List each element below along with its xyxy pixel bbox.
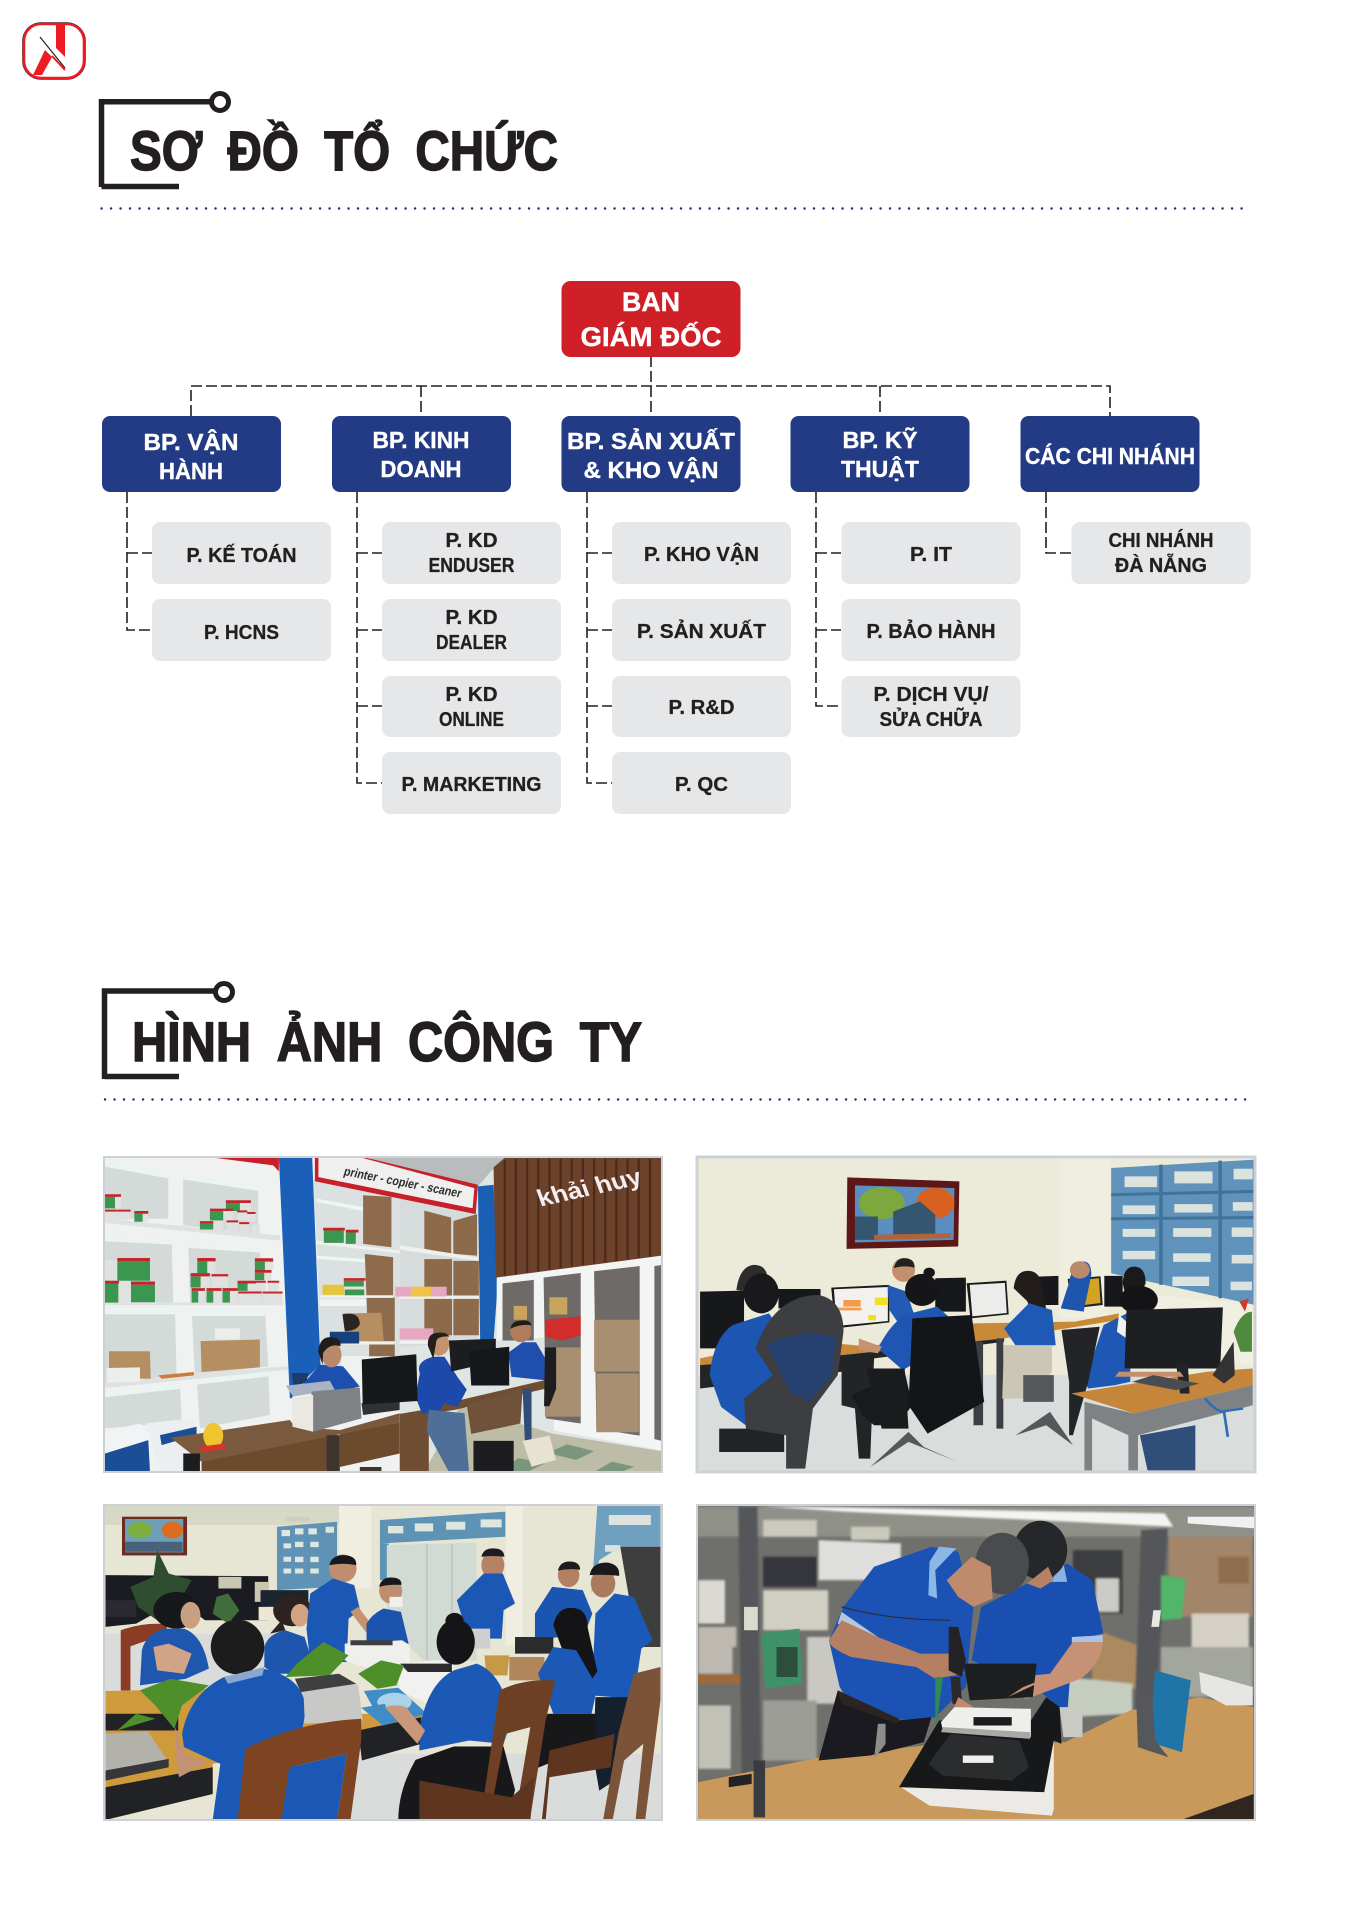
section heading: HÌNH ẢNH CÔNG TY: HÌNH ẢNH CÔNG TY	[132, 1010, 642, 1073]
box: P. KHO VẬN	[612, 522, 791, 584]
box: BP. SẢN XUẤT & KHO VẬN: & KHO VẬN	[584, 456, 718, 483]
box: P. KẾ TOÁN: P. KẾ TOÁN	[186, 544, 296, 567]
box: BAN GIÁM ĐỐC: BAN	[622, 287, 680, 317]
technician right	[972, 1521, 1104, 1714]
scanner and printer	[106, 1674, 427, 1781]
box: P. KD DEALER: DEALER	[436, 631, 507, 654]
section heading: SƠ ĐỒ TỔ CHỨC	[102, 94, 558, 187]
seated staff, foreground	[175, 1608, 597, 1820]
box: P. BẢO HÀNH: P. BẢO HÀNH	[866, 620, 996, 643]
box: P. R&D	[612, 676, 791, 737]
second desk	[400, 1379, 552, 1472]
box: BP. SẢN XUẤT & KHO VẬN: BP. SẢN XUẤT	[567, 426, 736, 454]
photo: office workstations	[697, 1157, 1255, 1472]
wall painting	[847, 1177, 959, 1249]
box: BP. KỸ THUẬT: BP. KỸ	[842, 426, 918, 453]
box: P. KD ONLINE	[382, 676, 561, 737]
computers	[362, 1339, 509, 1404]
box: P. KHO VẬN: P. KHO VẬN	[644, 542, 759, 566]
wooden chairs	[121, 1630, 660, 1820]
box: P. R&D: P. R&D	[668, 696, 734, 719]
floor	[424, 1406, 662, 1472]
box: P. KẾ TOÁN	[152, 522, 331, 584]
staff at desks	[710, 1258, 1158, 1452]
technician left	[819, 1533, 1029, 1761]
box: CHI NHÁNH ĐÀ NẴNG	[1072, 522, 1250, 584]
rack posts	[738, 1507, 1168, 1819]
box: CHI NHÁNH ĐÀ NẴNG: ĐÀ NẴNG	[1115, 554, 1207, 577]
box: P. KD DEALER: P. KD	[446, 606, 498, 629]
box: CÁC CHI NHÁNH: CÁC CHI NHÁNH	[1025, 442, 1195, 469]
box: BP. KỸ THUẬT: THUẬT	[841, 455, 920, 482]
box: P. QC	[612, 752, 791, 814]
box: P. MARKETING	[382, 752, 561, 814]
wood wall with logo	[494, 1157, 662, 1278]
section heading: HÌNH ẢNH CÔNG TY	[104, 984, 642, 1079]
org chart	[102, 281, 1250, 814]
blurred equipment	[729, 1575, 1253, 1817]
box: BP. SẢN XUẤT & KHO VẬN	[562, 416, 740, 492]
blue window	[1111, 1160, 1255, 1305]
workbench	[698, 1697, 1253, 1819]
box: BP. KINH DOANH	[332, 416, 511, 492]
box: BAN GIÁM ĐỐC: GIÁM ĐỐC	[580, 320, 722, 352]
windows	[277, 1505, 660, 1594]
box: P. DỊCH VỤ/ SỬA CHỮA: SỬA CHỮA	[880, 707, 983, 731]
ceiling light	[759, 1506, 1173, 1527]
box: P. HCNS	[152, 599, 331, 661]
box: BAN GIÁM ĐỐC	[562, 281, 740, 357]
box: P. KD DEALER	[382, 599, 561, 661]
photo: team meeting	[104, 1505, 662, 1820]
shelves left part	[105, 1158, 400, 1471]
middle shelves	[400, 1199, 478, 1347]
ceiling	[366, 1157, 507, 1186]
box: P. SẢN XUẤT: P. SẢN XUẤT	[637, 620, 766, 643]
box: P. IT	[842, 522, 1020, 584]
glass cabinet	[497, 1256, 662, 1451]
connectors	[127, 356, 1110, 783]
box: P. DỊCH VỤ/ SỬA CHỮA: P. DỊCH VỤ/	[874, 683, 989, 706]
table and foliage	[106, 1642, 509, 1819]
box: P. BẢO HÀNH	[842, 599, 1020, 661]
printer	[286, 1381, 400, 1432]
desks	[700, 1313, 1119, 1367]
photo: showroom front desk	[104, 1157, 662, 1472]
brand boxes and mascot	[105, 1418, 197, 1471]
toner boxes	[105, 1194, 365, 1303]
office chairs	[744, 1295, 1100, 1469]
box: P. SẢN XUẤT	[612, 599, 791, 661]
box: P. KD ENDUSER	[382, 522, 561, 584]
box: P. QC: P. QC	[675, 773, 728, 796]
box: CHI NHÁNH ĐÀ NẴNG: CHI NHÁNH	[1108, 529, 1214, 552]
box: P. KD ONLINE: ONLINE	[439, 708, 504, 731]
staff member	[292, 1337, 360, 1393]
photo: technicians repairing scanner	[697, 1505, 1255, 1820]
box: BP. VẬN HÀNH: BP. VẬN	[144, 428, 238, 455]
logo	[24, 23, 84, 78]
store sign: printer - copier - scaner	[342, 1165, 464, 1201]
wood wall with logo: khải huy	[533, 1163, 645, 1211]
box: BP. KINH DOANH: DOANH	[380, 456, 462, 482]
printers on table	[345, 1629, 553, 1704]
box: BP. VẬN HÀNH: HÀNH	[159, 457, 223, 484]
box: P. MARKETING: P. MARKETING	[402, 773, 542, 796]
box: P. KD ENDUSER: ENDUSER	[428, 554, 515, 577]
box: BP. VẬN HÀNH	[102, 416, 281, 492]
section heading: SƠ ĐỒ TỔ CHỨC: SƠ ĐỒ TỔ CHỨC	[130, 119, 558, 182]
box: BP. KINH DOANH: BP. KINH	[372, 427, 470, 453]
wall painting	[122, 1517, 187, 1555]
box: P. KD ONLINE: P. KD	[446, 683, 498, 706]
box: BP. KỸ THUẬT	[790, 416, 970, 492]
monitors	[700, 1276, 1123, 1348]
staff	[415, 1320, 556, 1472]
desk foreground	[1071, 1298, 1253, 1470]
seated staff, back	[121, 1548, 653, 1791]
box: P. KD ENDUSER: P. KD	[446, 529, 498, 552]
blurred shelving background	[697, 1507, 1255, 1769]
box: CÁC CHI NHÁNH	[1020, 416, 1200, 492]
first desk	[171, 1413, 400, 1472]
scanner	[899, 1664, 1083, 1816]
box: P. IT: P. IT	[910, 543, 952, 566]
box: P. HCNS: P. HCNS	[204, 621, 279, 644]
store sign	[315, 1158, 478, 1214]
cardboard boxes	[107, 1313, 384, 1383]
background desks, monitors and plant	[106, 1550, 308, 1627]
box: P. DỊCH VỤ/ SỬA CHỮA	[842, 676, 1020, 737]
